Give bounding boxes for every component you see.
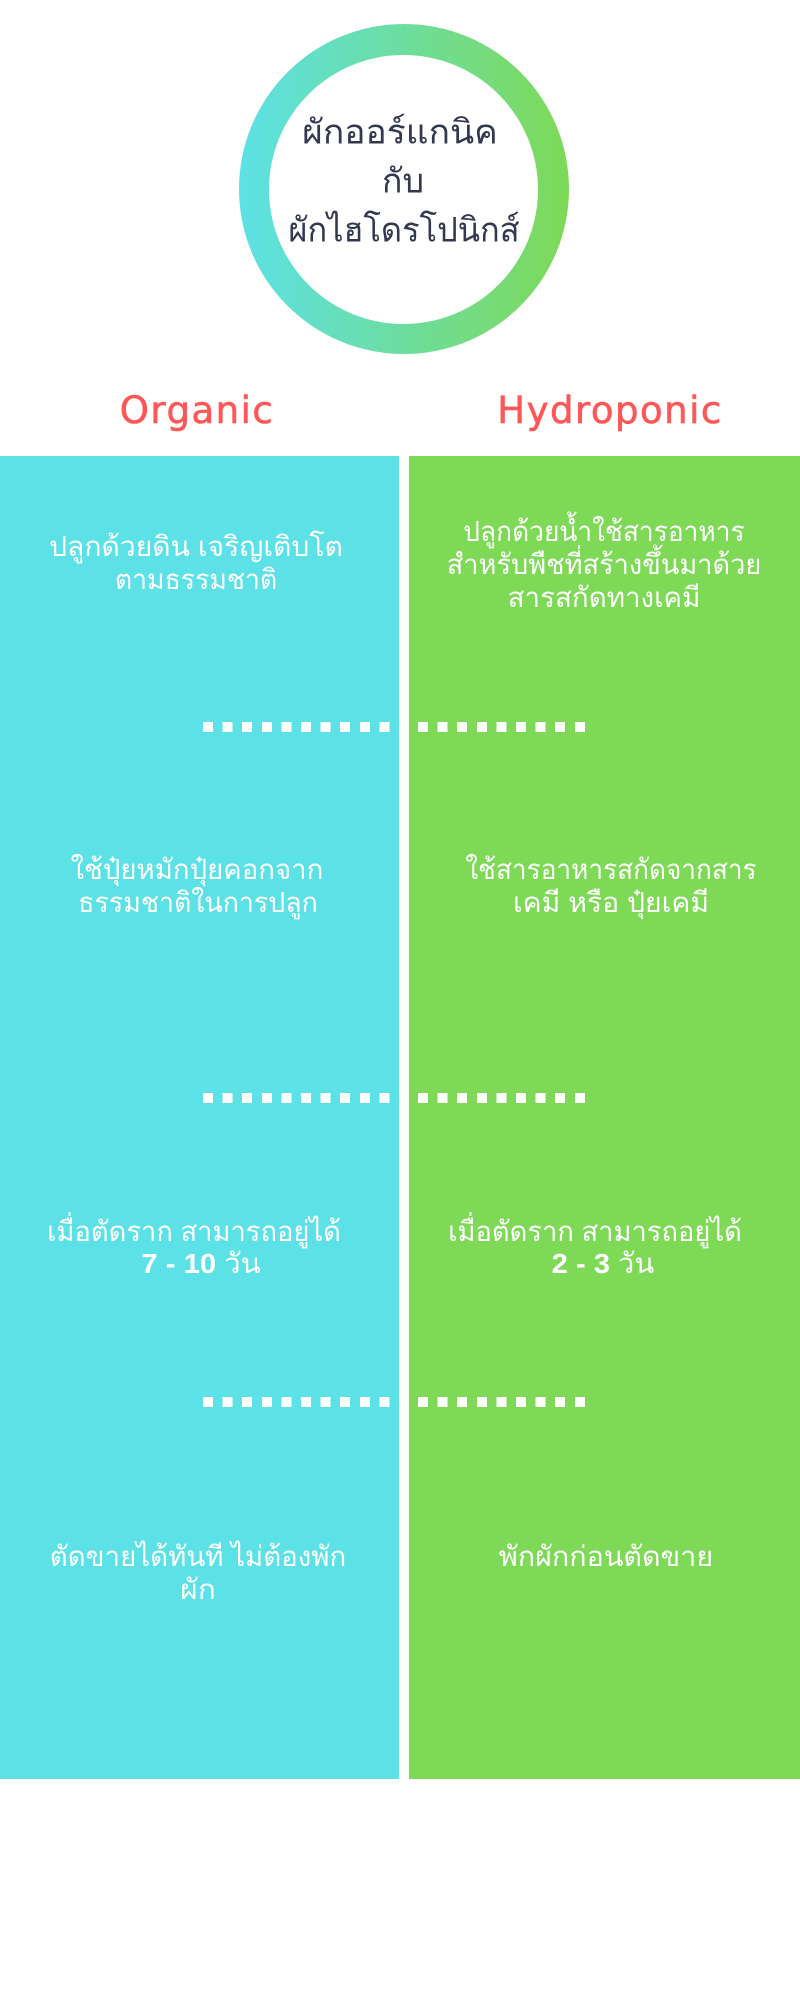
organic: growing medium: ตามธรรมชาติ [115,564,277,595]
title: ผักออร์แกนิค [302,114,497,152]
title [288,114,520,250]
dotted divider 2 right [418,1093,586,1103]
hydroponic: growing medium: สำหรับพืชที่สร้างขึ้นมาด้วย [447,549,761,580]
hydroponic: fertiliser: ใช้สารอาหารสกัดจากสาร [465,854,757,885]
organic: selling: ตัดขายได้ทันที ไม่ต้องพัก [50,1541,346,1572]
hydroponic: selling: พักผักก่อนตัดขาย [499,1541,713,1572]
dotted divider 1 left [203,722,390,732]
organic: selling: ผัก [180,1574,216,1605]
organic: shelf life: เมื่อตัดราก สามารถอยู่ได้ [47,1216,341,1247]
ring inner circle [269,55,538,324]
badge: gradient ring with title [239,24,569,354]
title: กับ [382,163,424,201]
organic: fertiliser: ธรรมชาติในการปลูก [78,887,318,918]
hydroponic: growing medium: ปลูกด้วยน้ำใช้สารอาหาร [463,516,745,547]
dotted divider 2 left [203,1093,390,1103]
dotted divider 1 right [418,722,586,732]
panel: organic [0,456,399,1779]
gradient ring [239,24,569,354]
title: ผักไฮโดรโปนิกส์ [288,212,520,250]
hydroponic: growing medium: สารสกัดทางเคมี [508,582,700,613]
hydroponic: fertiliser: เคมี หรือ ปุ๋ยเคมี [513,887,709,918]
panel: hydroponic [409,456,800,1779]
hydroponic: shelf life: เมื่อตัดราก สามารถอยู่ได้ [448,1216,742,1247]
organic: shelf life: 7 - 10 วัน [141,1248,261,1279]
heading: Hydroponic: Hydroponic [497,389,723,432]
organic: fertiliser: ใช้ปุ๋ยหมักปุ๋ยคอกจาก [71,854,323,885]
dotted divider 3 left [203,1397,390,1407]
heading: Organic: Organic [120,389,274,432]
dotted divider 3 right [418,1397,586,1407]
hydroponic: shelf life: 2 - 3 วัน [552,1248,654,1279]
organic: growing medium: ปลูกด้วยดิน เจริญเติบโต [49,531,343,562]
